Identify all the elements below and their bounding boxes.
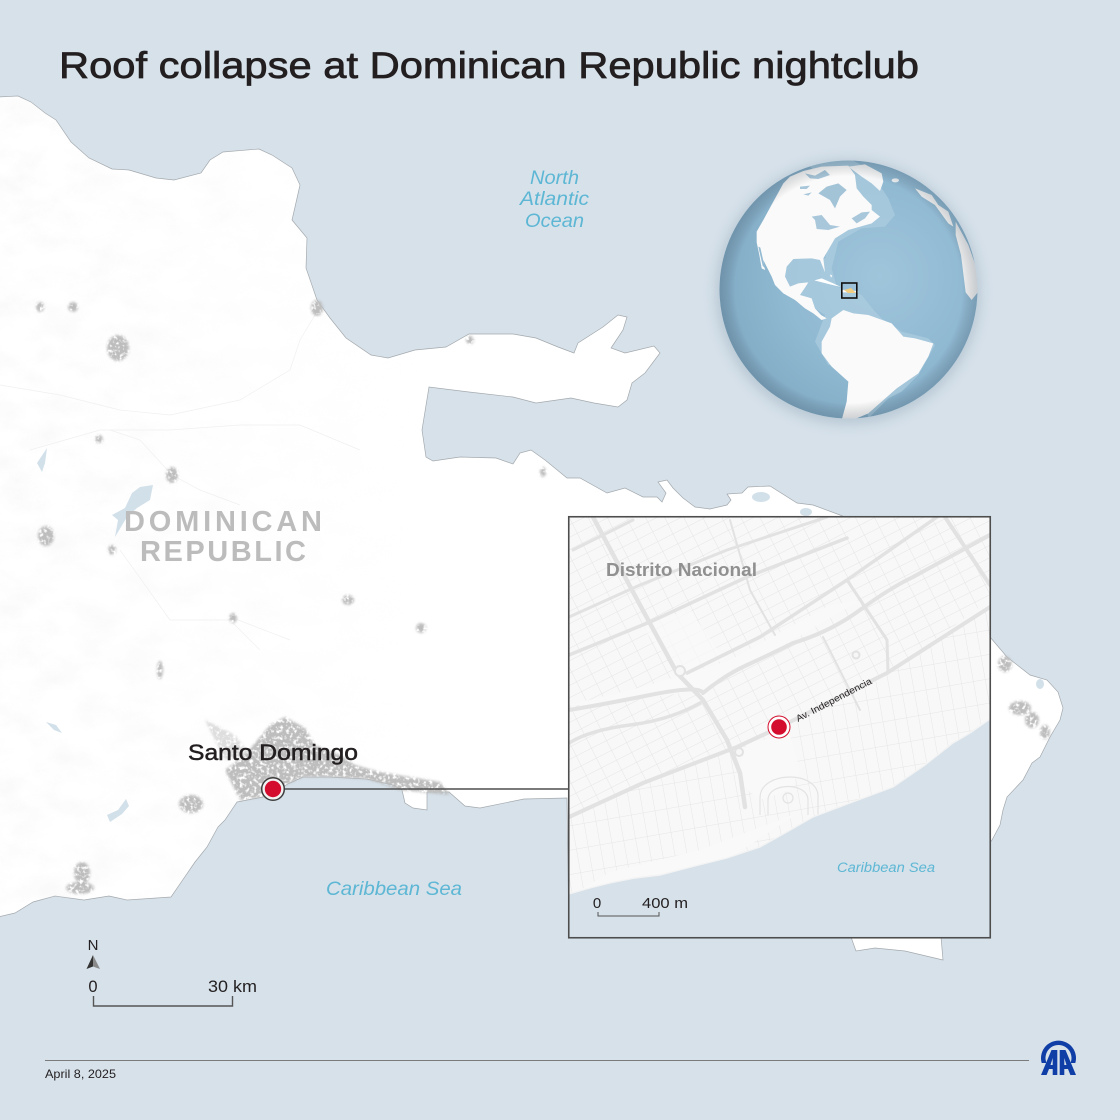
inset land (570, 518, 990, 893)
label: Dominican Republic: DOMINICAN (124, 506, 322, 538)
Caribbean islands (814, 274, 841, 287)
urban areas (36, 300, 1050, 894)
north arrow: N (88, 937, 98, 954)
Greenland (848, 164, 883, 191)
inset label: Av. Independencia: Av. Independencia (794, 676, 875, 725)
inset label: Caribbean Sea: Caribbean Sea (837, 860, 936, 875)
map scale bar: 0 (88, 978, 98, 996)
Europe (915, 188, 953, 227)
Hudson Bay (818, 183, 847, 208)
terrain texture (17, 96, 236, 899)
label: Dominican Republic: REPUBLIC (140, 536, 306, 568)
north arrow (86, 937, 100, 969)
Hispaniola neighbours (841, 290, 858, 292)
lakes (37, 448, 1044, 822)
label: North Atlantic Ocean (519, 168, 590, 232)
parks and open blocks (569, 600, 860, 897)
concentric block (760, 777, 818, 815)
Arctic channels (800, 170, 830, 196)
label: North Atlantic Ocean: Ocean (525, 211, 584, 232)
label: Caribbean Sea: Caribbean Sea (326, 879, 462, 900)
locator globe (716, 158, 980, 424)
inset label: Distrito Nacional: Distrito Nacional (606, 560, 757, 580)
inset scale bar (593, 895, 688, 916)
inset scale bar: 400 m (642, 895, 688, 912)
Iceland (892, 178, 899, 182)
Great Lakes (812, 215, 840, 230)
Gulf of St Lawrence (852, 212, 870, 223)
continental shelf (782, 158, 935, 418)
inset pin (768, 716, 790, 738)
label: North Atlantic Ocean: North (530, 168, 579, 189)
inset scale bar: 0 (593, 895, 601, 912)
map: Dominican Republic land (0, 90, 1063, 960)
connector line (285, 788, 569, 790)
Africa (956, 222, 978, 300)
logo: AA (1041, 1041, 1076, 1075)
title: Roof collapse at Dominican Republic nightclub (59, 44, 919, 86)
Gulf of California (758, 247, 765, 268)
inset frame (569, 517, 990, 938)
map scale bar (88, 978, 257, 1006)
main roads (569, 517, 990, 817)
label: Dominican Republic (124, 506, 322, 568)
island: Isla Saona (851, 937, 943, 960)
inset coast (569, 719, 990, 894)
footer rule (45, 1060, 1029, 1062)
label: North Atlantic Ocean: Atlantic (519, 189, 590, 210)
pin: Santo Domingo (262, 778, 284, 800)
roundabouts (675, 652, 860, 756)
locator box (842, 283, 857, 298)
South America (822, 310, 933, 420)
map scale bar: 30 km (208, 978, 257, 996)
label: Santo Domingo: Santo Domingo (188, 740, 358, 765)
date: April 8, 2025 (45, 1067, 116, 1081)
inset map: Distrito Nacional (569, 517, 990, 938)
faint roads (0, 310, 360, 650)
North America (757, 166, 880, 320)
